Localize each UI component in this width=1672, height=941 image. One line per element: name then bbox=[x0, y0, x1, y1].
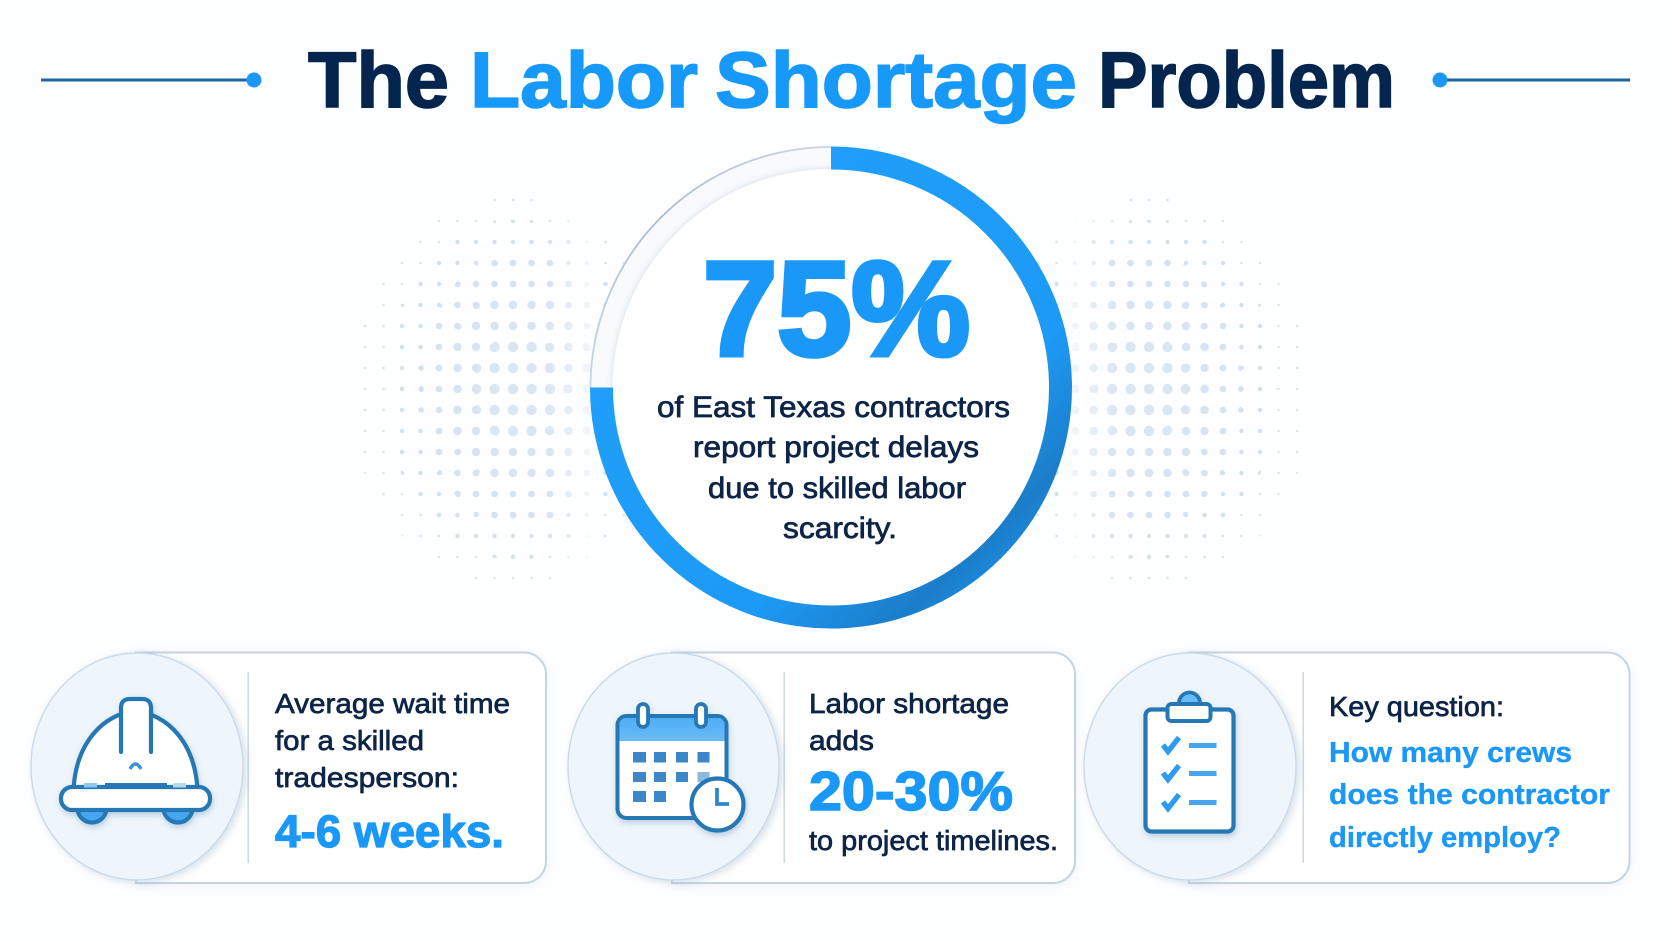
card text bbox=[275, 688, 510, 857]
card text: Average wait time bbox=[275, 688, 510, 719]
stat description: due to skilled labor bbox=[708, 472, 966, 505]
divider bbox=[248, 672, 249, 863]
card text: Labor shortage bbox=[809, 688, 1009, 719]
card text: tradesperson: bbox=[275, 762, 459, 793]
donut track bbox=[590, 147, 1071, 628]
card text: 20-30% bbox=[809, 760, 1013, 822]
card text: adds bbox=[809, 725, 874, 756]
halftone dots left bbox=[350, 190, 670, 590]
right title rule with dot bbox=[1432, 72, 1630, 88]
card text bbox=[809, 688, 1058, 856]
left title rule with dot bbox=[41, 72, 262, 88]
donut progress arc 75% bbox=[602, 158, 1060, 617]
card text: How many crews bbox=[1329, 737, 1572, 769]
big number: 75% bbox=[703, 235, 970, 384]
card text: Key question: bbox=[1329, 691, 1504, 722]
card text: does the contractor bbox=[1329, 779, 1610, 811]
card body bbox=[1189, 652, 1630, 883]
icon disc bbox=[1084, 653, 1296, 880]
stat description: of East Texas contractors bbox=[657, 391, 1010, 424]
halftone dots right bbox=[992, 190, 1312, 590]
donut centre bbox=[612, 169, 1050, 606]
card body bbox=[136, 652, 546, 883]
title text: Labor bbox=[470, 35, 698, 124]
divider bbox=[784, 672, 785, 863]
icon disc bbox=[31, 653, 243, 880]
title text: The bbox=[308, 35, 449, 124]
icon: calendar with clock bbox=[618, 704, 744, 830]
panel: timeline impact bbox=[568, 652, 1075, 883]
icon disc bbox=[568, 653, 779, 880]
main 75% donut stat bbox=[590, 147, 1071, 628]
stat description: scarcity. bbox=[783, 512, 897, 545]
card text: to project timelines. bbox=[809, 825, 1058, 856]
icon: hard hat bbox=[61, 699, 210, 822]
divider bbox=[1302, 672, 1304, 863]
title with side rules bbox=[41, 35, 1630, 124]
panel: key question bbox=[1084, 652, 1630, 883]
card text: for a skilled bbox=[275, 725, 424, 756]
card text: 4-6 weeks. bbox=[275, 806, 504, 857]
title text bbox=[308, 35, 1395, 124]
icon: clipboard checklist bbox=[1146, 692, 1234, 832]
card text bbox=[1329, 691, 1610, 854]
title text: Problem bbox=[1098, 35, 1395, 124]
stat description: report project delays bbox=[693, 431, 979, 464]
title text: Shortage bbox=[715, 35, 1077, 124]
card body bbox=[672, 652, 1075, 883]
card text: directly employ? bbox=[1329, 822, 1561, 854]
panel: wait time bbox=[31, 652, 546, 883]
stat description bbox=[657, 391, 1010, 545]
